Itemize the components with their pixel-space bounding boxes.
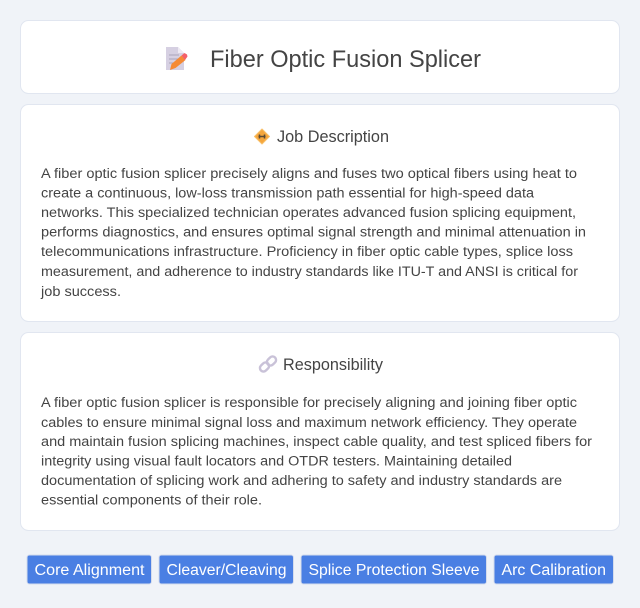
tag: splice protection sleeve: [301, 555, 486, 584]
tag: core alignment: [27, 555, 152, 584]
text block: job description: job success.: [40, 284, 121, 300]
text block: responsibility: [41, 395, 592, 508]
title: Fiber Optic Fusion Splicer: [210, 46, 481, 73]
icon: document with pencil: [166, 47, 188, 70]
text block: job description: A fiber optic fusion splicer precisely aligns and fuses two optical fibers using heat to: [41, 166, 577, 182]
heading: job description: Job Description: [277, 128, 389, 146]
tag: cleaver/cleaving: Cleaver/Cleaving: [166, 562, 286, 579]
panel: job description: [20, 104, 620, 322]
text block: job description: performs diagnostics, and ensures optimal signal strength and minimal attenuation in: [41, 224, 586, 240]
text block: job description: create a continuous, low-loss transmission path essential for high-speed data: [41, 186, 534, 202]
heading: responsibility: Responsibility: [283, 356, 384, 374]
tag: cleaver/cleaving: [159, 555, 294, 584]
icon: diamond sign: [254, 129, 270, 144]
icon: chain link: [258, 355, 278, 373]
text block: responsibility: essential components of their role.: [41, 492, 262, 508]
text block: job description: networks. This specialized technician operates advanced fusion splicing equipment,: [41, 205, 576, 221]
text block: responsibility: and maintain fusion splicing machines, inspect cable quality, and test spliced fibers for: [41, 434, 592, 450]
text block: responsibility: documentation of splicing work and adhering to safety and industry standards are: [41, 473, 562, 489]
panel: responsibility: [20, 332, 620, 530]
text block: job description: [40, 166, 586, 300]
text block: responsibility: integrity using visual fault locators and OTDR testers. Maintaining detailed: [41, 454, 512, 470]
text block: responsibility: cables to ensure minimal signal loss and maximum network efficiency. They operate: [41, 415, 577, 431]
panel: title header: [20, 20, 620, 94]
tag: arc calibration: Arc Calibration: [502, 562, 606, 579]
tag: arc calibration: [494, 555, 614, 584]
text block: job description: telecommunications infrastructure. Proficiency in fiber optic cable types, splice loss: [41, 244, 573, 260]
tag: core alignment: Core Alignment: [34, 562, 145, 579]
text block: job description: measurement, and adherence to industry standards like ITU-T and ANSI is critical for: [41, 264, 578, 280]
text block: responsibility: A fiber optic fusion splicer is responsible for precisely aligning and joining fiber optic: [41, 395, 577, 411]
tag: splice protection sleeve: Splice Protection Sleeve: [308, 562, 480, 579]
